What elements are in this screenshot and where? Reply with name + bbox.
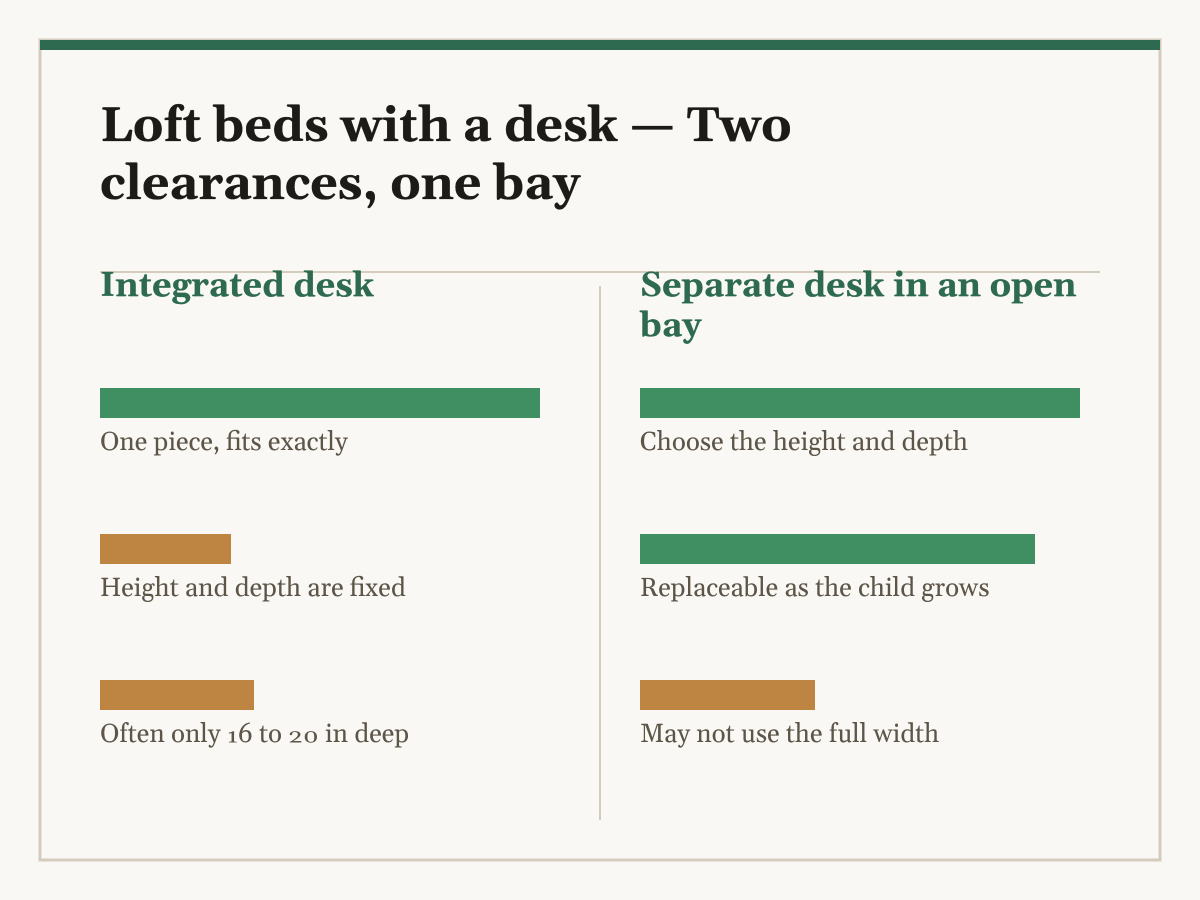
row: may not use full width: May not use the full width <box>640 718 939 751</box>
top accent bar <box>40 40 1160 50</box>
row: choose height <box>640 388 1080 459</box>
row: one piece <box>100 388 540 459</box>
heading: separate desk: Separate desk in an open <box>640 264 1077 308</box>
title: Loft beds with a desk — Two <box>100 97 792 158</box>
row: may not use full width <box>640 680 939 751</box>
row: often shallow: 20 <box>288 725 319 749</box>
heading: integrated desk: Integrated desk <box>100 264 374 308</box>
heading: separate desk <box>639 264 1077 348</box>
row: replaceable: Replaceable as the child grows <box>640 572 990 605</box>
row: often shallow: Often only 6 to in deep <box>100 718 409 751</box>
panel: separate desk <box>639 264 1080 751</box>
title: clearances, one bay <box>100 155 580 216</box>
row: one piece: One piece, fits exactly <box>100 426 348 459</box>
row: height and depth fixed: Height and depth are fixed <box>100 572 406 605</box>
title <box>100 97 792 216</box>
row: replaceable <box>640 534 1035 605</box>
row: often shallow: 1 <box>227 725 238 749</box>
row: choose height: Choose the height and depth <box>640 426 968 459</box>
row: height and depth fixed <box>100 534 406 605</box>
panel: integrated desk <box>100 264 540 751</box>
row: often shallow <box>100 680 409 751</box>
heading: separate desk: bay <box>640 304 701 348</box>
